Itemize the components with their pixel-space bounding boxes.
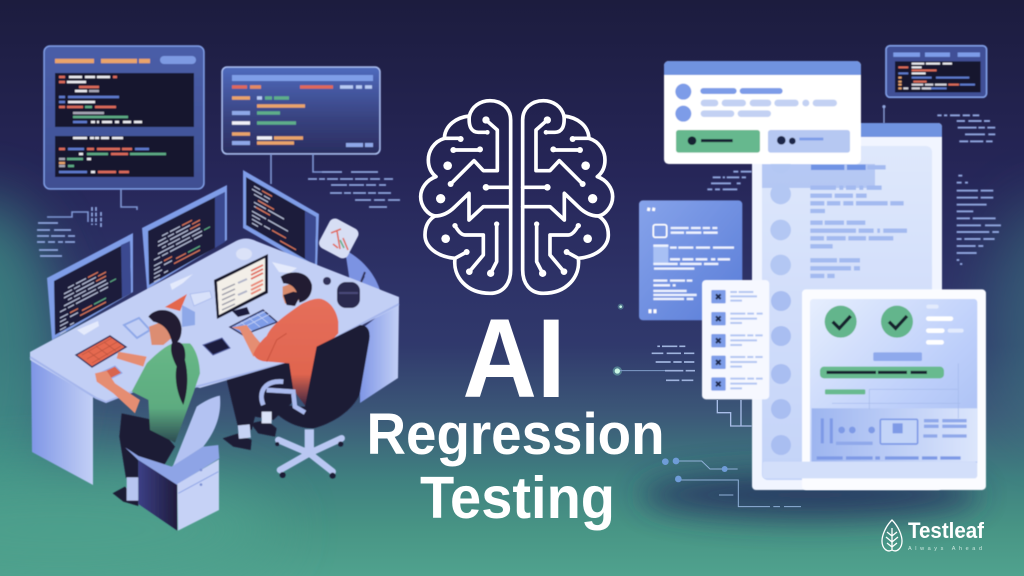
monitor: far left <box>47 233 133 340</box>
person: woman in green shirt <box>95 310 200 506</box>
result rows <box>770 153 907 276</box>
side circles <box>771 291 791 455</box>
small code window <box>886 46 987 97</box>
keyboards <box>76 310 277 379</box>
top profile card <box>664 61 861 164</box>
desk illustration <box>30 170 399 531</box>
green check icons <box>825 306 913 338</box>
title <box>366 296 664 531</box>
checklist card <box>702 280 769 399</box>
connector lines and dashes: left <box>37 154 400 256</box>
right code panel <box>222 67 380 154</box>
desk top and legs <box>30 238 399 485</box>
blue document card <box>639 200 742 320</box>
logo: leaf icon <box>882 520 902 551</box>
desk items <box>124 272 365 355</box>
left code panel <box>44 46 204 189</box>
woman's chair and drawer pedestal <box>125 396 220 531</box>
brain icon <box>421 101 613 293</box>
green status bar <box>820 367 944 378</box>
blue button <box>768 130 850 153</box>
monitor: middle <box>142 185 227 289</box>
green button <box>676 130 760 153</box>
notebook behind desk <box>317 216 382 300</box>
title: Testing: Testing <box>420 465 615 531</box>
glowing nodes and dashes <box>613 304 695 380</box>
center monitor <box>214 254 268 319</box>
logo: tagline: Always Ahead <box>908 546 982 552</box>
brain: left hemisphere <box>421 101 511 293</box>
brain: right hemisphere <box>523 101 613 293</box>
Testleaf logo <box>882 518 985 552</box>
circuit lines <box>613 304 801 507</box>
title: Regression: Regression <box>366 402 664 467</box>
title: AI: AI <box>462 296 566 421</box>
tall results panel <box>752 123 942 490</box>
monitor: right <box>243 170 319 271</box>
person: man in red shirt <box>223 272 338 450</box>
right side dashes and small code window <box>707 46 1001 264</box>
logo: wordmark: Testleaf <box>908 518 985 543</box>
office chair <box>262 325 370 479</box>
test result panel <box>762 289 986 490</box>
connectors below checklist <box>717 400 752 426</box>
